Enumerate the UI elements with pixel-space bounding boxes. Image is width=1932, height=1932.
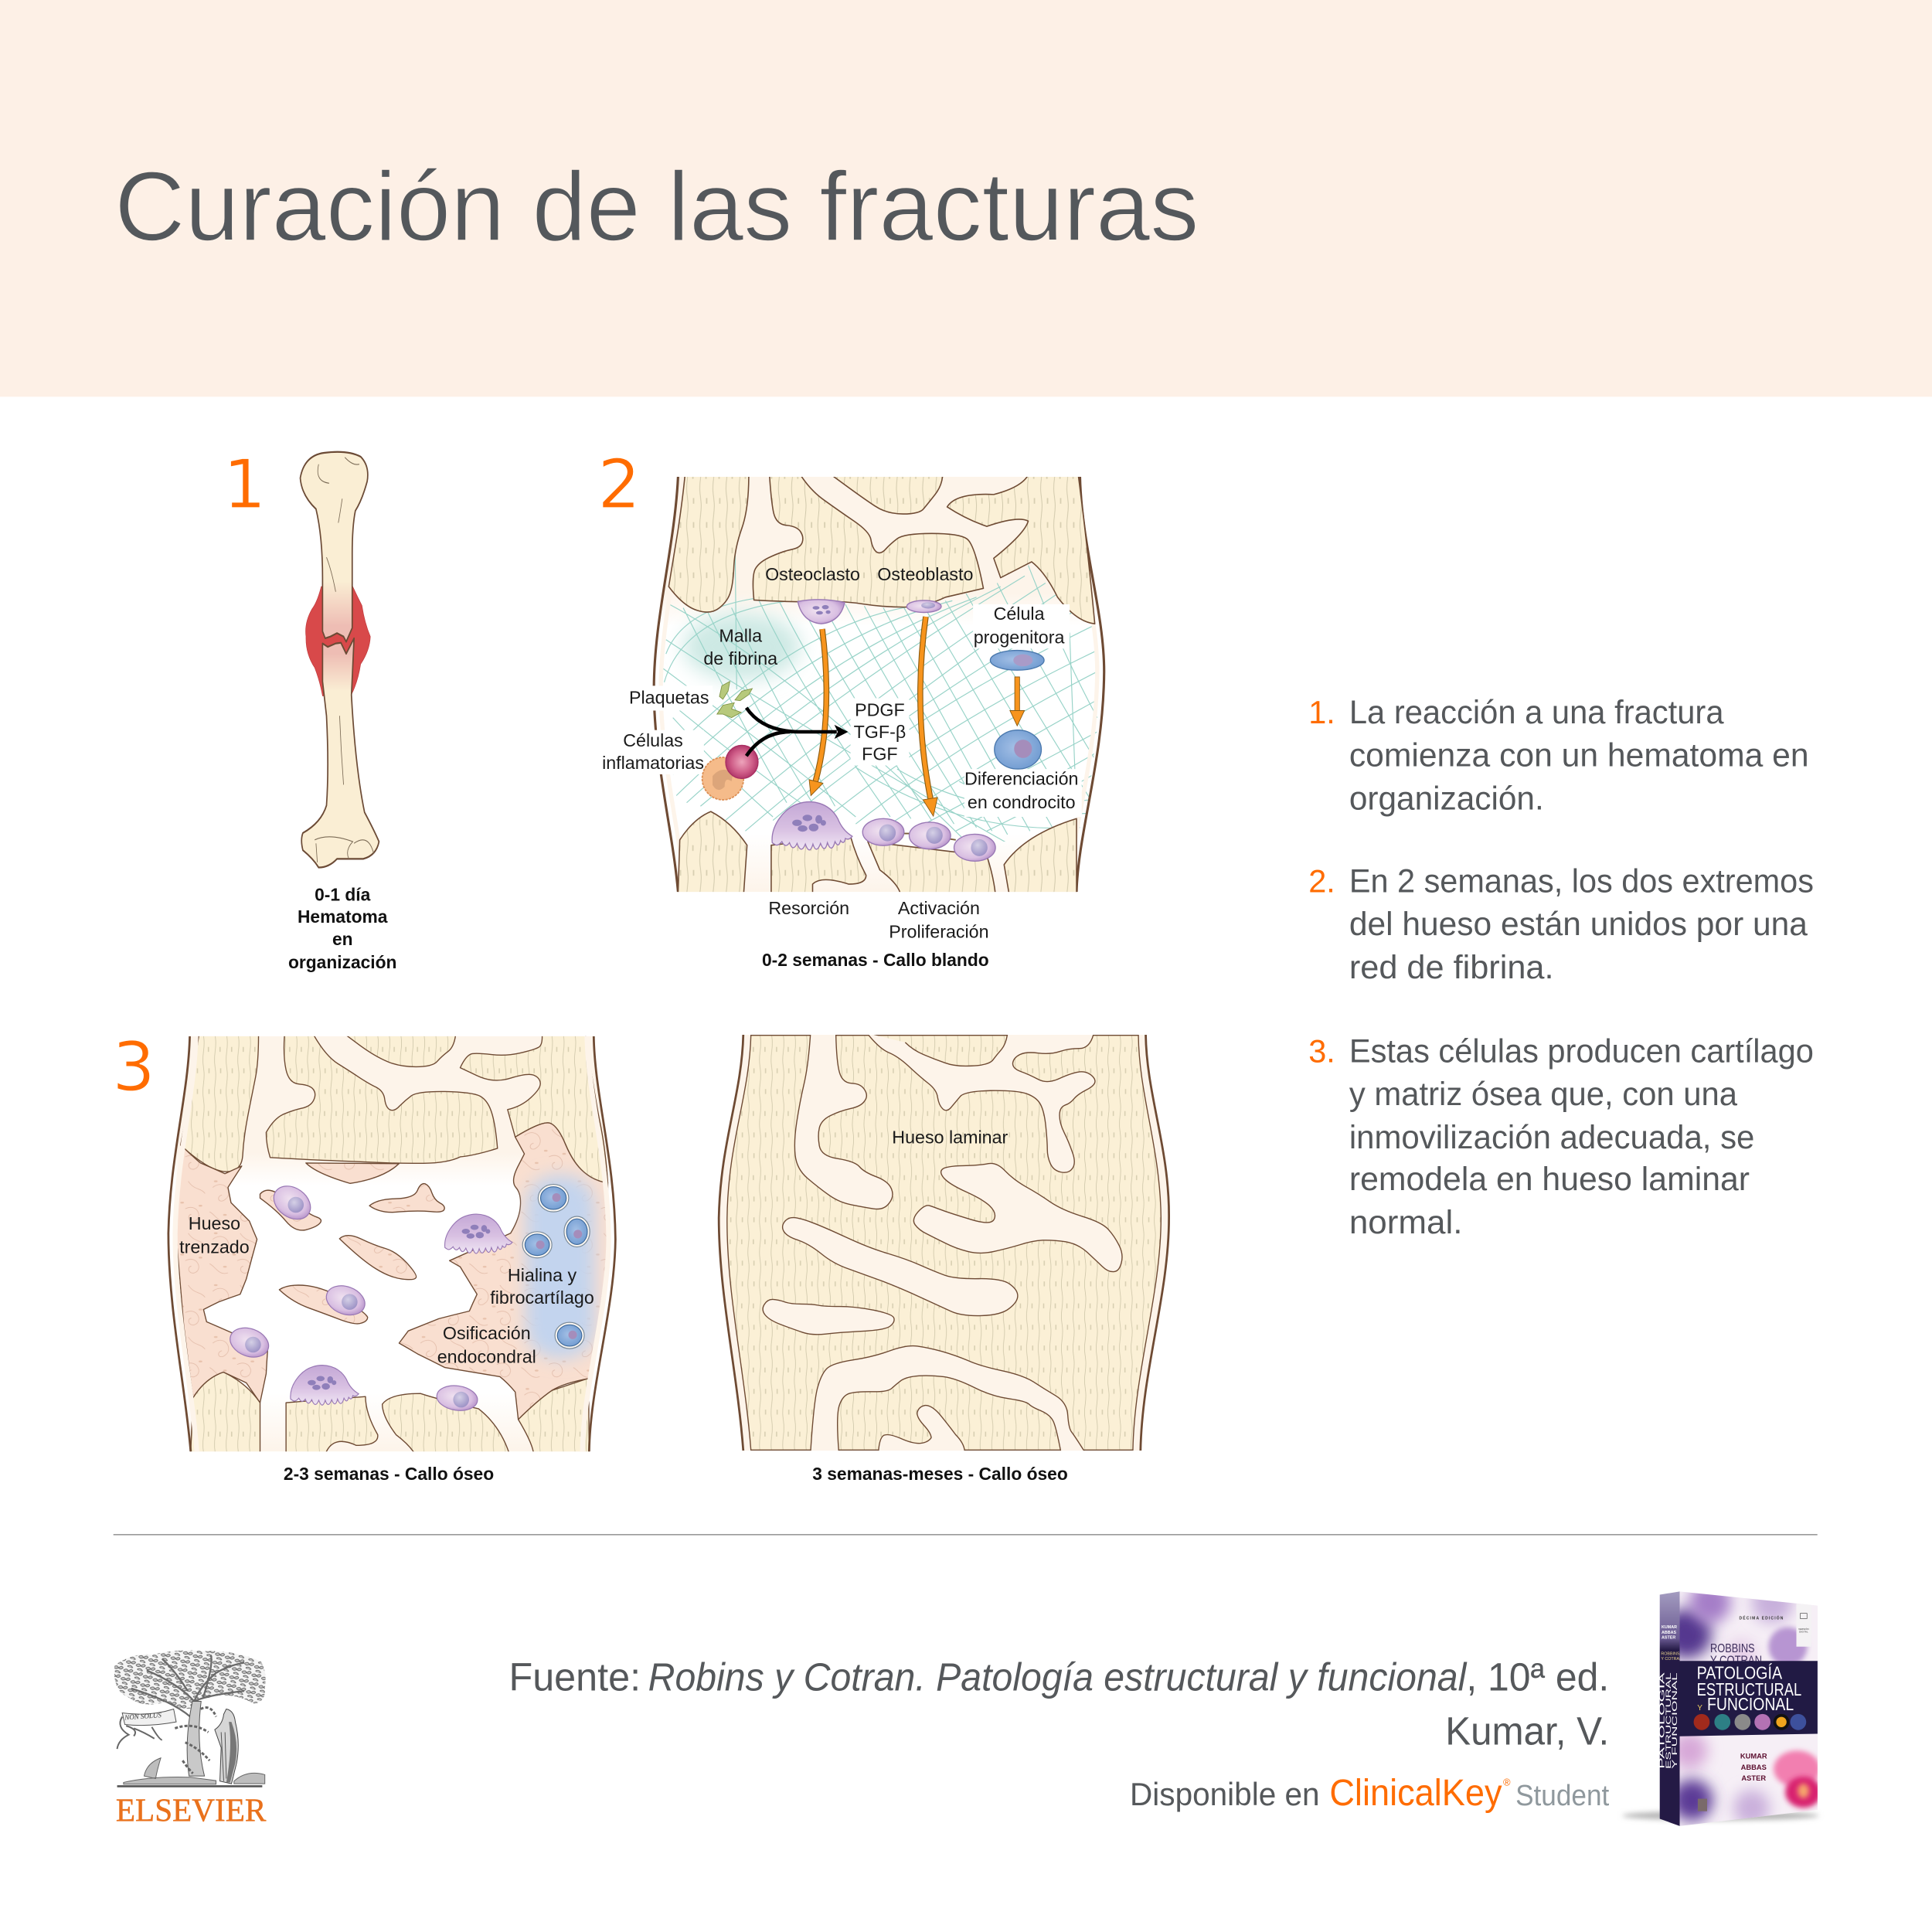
step 3: 3.: [1308, 1032, 1335, 1069]
woven bone: [176, 1123, 607, 1420]
cortical outlines: [719, 1035, 1169, 1451]
labels panel 3: Hialina y: [508, 1265, 577, 1285]
labels panel 3: trenzado: [179, 1236, 250, 1257]
caption panel 2: 0-2 semanas - Callo blando: [762, 950, 989, 970]
step 1: [1308, 694, 1809, 818]
orange arrow: activation: [920, 617, 937, 816]
lamellar bone body: [727, 1036, 1161, 1450]
caption panel 3: 2-3 semanas - Callo óseo: [284, 1464, 494, 1484]
labels panel 2: Resorción: [768, 898, 849, 918]
number 3: 3: [112, 1028, 155, 1107]
marrow cavities: [763, 1033, 1122, 1453]
front cover: [1662, 1582, 1821, 1828]
step 1: organización.: [1349, 781, 1544, 818]
source citation: [509, 1655, 1609, 1753]
step 3: normal.: [1349, 1204, 1463, 1241]
chondrocytes: [522, 1185, 590, 1349]
digital version badge: [1797, 1604, 1811, 1647]
labels panel 3: Hueso: [189, 1213, 240, 1233]
progenitor cell: [990, 651, 1044, 670]
caption panel 4: 3 semanas-meses - Callo óseo: [812, 1464, 1068, 1484]
number 1: 1: [223, 445, 266, 524]
panel 1: fractured bone: [288, 452, 396, 972]
source citation: Robins y Cotran. Patología estructural y funcional: [648, 1655, 1468, 1699]
source citation: Kumar, V.: [1445, 1709, 1609, 1753]
caption panel 1: Hematoma: [298, 906, 388, 927]
cortical band: [661, 477, 1097, 892]
title: Curación de las fracturas: [114, 152, 1199, 262]
inflammatory cell: orange: [702, 757, 743, 800]
orange arrow: differentiation: [1010, 677, 1025, 726]
front cover: ESTRUCTURAL: [1697, 1679, 1801, 1699]
authors: KUMAR: [1740, 1751, 1767, 1760]
header band: [0, 0, 1932, 396]
labels panel 2: progenitora: [974, 627, 1064, 647]
bone fragments: [181, 1035, 607, 1453]
labels panel 2: TGF-β: [854, 722, 906, 742]
osteoclast right: [445, 1214, 512, 1253]
orange arrow: resorption: [809, 629, 826, 795]
labels panel 3: fibrocartílago: [490, 1287, 594, 1308]
labels panel 2: Célula: [994, 604, 1045, 624]
source citation: , 10ª ed.: [1466, 1655, 1609, 1699]
ground shrubs: [124, 1758, 265, 1784]
tree branches: [131, 1655, 244, 1716]
osteoclast bottom: [291, 1366, 359, 1405]
step 1: La reacción a una fractura: [1349, 694, 1724, 731]
spine: Y FUNCIONAL: [1671, 1672, 1679, 1769]
step 2: [1308, 862, 1814, 986]
labels panel 2: Plaquetas: [629, 687, 709, 707]
step 3: Estas células producen cartílago: [1349, 1032, 1814, 1070]
chain of osteoblasts: [862, 818, 995, 861]
top small osteoclast: [798, 600, 845, 624]
tree canopy: [111, 1647, 270, 1714]
labels panel 2: inflamatorias: [602, 753, 704, 773]
series title: ROBBINS: [1710, 1642, 1755, 1655]
panel 2: soft callus: [600, 475, 1104, 970]
step 2: red de fibrina.: [1349, 949, 1554, 986]
edition: DÉCIMA EDICIÓN: [1740, 1614, 1784, 1621]
availability line: Student: [1515, 1779, 1610, 1812]
front cover: Y COTRAN: [1710, 1655, 1762, 1668]
labels panel 2: Osteoblasto: [877, 564, 973, 584]
title band: [1680, 1661, 1818, 1736]
chondrocyte: [995, 730, 1041, 769]
banner: NON SOLUS: [124, 1711, 162, 1722]
label panel 4: Hueso laminar: [892, 1128, 1009, 1148]
spine: ASTER: [1662, 1636, 1675, 1641]
trunk: [187, 1701, 205, 1776]
Elsevier logo: [111, 1647, 270, 1828]
spine: Y COTRAN: [1661, 1657, 1682, 1662]
book shadow: [1622, 1811, 1819, 1820]
panel 3: bony callus: [168, 1035, 615, 1484]
authors: [1740, 1751, 1767, 1782]
caption panel 1: en: [332, 929, 353, 949]
micrograph circles: [1694, 1714, 1806, 1730]
vine leaves: [175, 1708, 216, 1774]
illustration: soft callus tissue: [652, 477, 1105, 892]
spine: [1658, 1591, 1682, 1826]
labels panel 2: de fibrina: [703, 648, 777, 668]
panel 4: lamellar bone: [719, 1033, 1169, 1484]
step 2: del hueso están unidos por una: [1349, 906, 1808, 943]
bone fragments: [668, 475, 1095, 895]
scholar figure: [215, 1709, 238, 1784]
inflammatory cell: pink: [726, 745, 758, 778]
book cover: [1622, 1582, 1821, 1828]
caption panel 1: [288, 884, 396, 972]
labels panel 2: Células: [623, 730, 683, 750]
illustration: bony callus: [168, 1035, 615, 1453]
illustration: remodelled lamellar bone: [719, 1033, 1169, 1453]
bone surface details: [315, 457, 374, 862]
step 2: 2.: [1308, 862, 1335, 899]
labels panel 3: [179, 1213, 594, 1366]
digital version badge: VERSIÓN: [1798, 1627, 1809, 1631]
spine: ABBAS: [1662, 1631, 1676, 1635]
explanatory list: [1308, 694, 1814, 1241]
upper bone fragment: [301, 452, 368, 641]
labels panel 3: endocondral: [437, 1346, 536, 1366]
spine: ROBBINS: [1661, 1651, 1680, 1657]
banner: [117, 1709, 176, 1749]
labels panel 2: Proliferación: [889, 921, 989, 941]
caption panel 1: 0-1 día: [315, 884, 371, 904]
spine: ESTRUCTURAL: [1665, 1672, 1672, 1769]
availability line: ClinicalKey: [1329, 1773, 1502, 1814]
hematoma: [306, 587, 370, 696]
caption panel 1: organización: [288, 952, 396, 972]
labels panel 3: Osificación: [443, 1323, 531, 1343]
labels panel 2: Activación: [898, 898, 980, 918]
availability line: [1130, 1773, 1610, 1814]
hyaline cartilage glow: [526, 1175, 594, 1359]
front cover: Y: [1697, 1704, 1702, 1713]
availability line: ®: [1503, 1776, 1511, 1787]
mini publisher mark: [1698, 1799, 1707, 1811]
resorbing osteoclast: [772, 802, 852, 850]
number 2: 2: [597, 445, 641, 524]
labels panel 2: Diferenciación: [964, 769, 1078, 789]
step 3: inmovilización adecuada, se: [1349, 1119, 1754, 1156]
labels panel 2: [602, 564, 1078, 941]
wordmark: ELSEVIER: [116, 1792, 267, 1828]
cortical outlines: [168, 1036, 615, 1451]
fibrin glow: [683, 613, 801, 681]
marrow background: [654, 477, 1104, 892]
platelets: [717, 682, 752, 718]
labels panel 2: FGF: [862, 744, 898, 764]
step 2: En 2 semanas, los dos extremos: [1349, 862, 1814, 900]
label backgrounds: [600, 604, 1082, 817]
authors: ASTER: [1741, 1774, 1766, 1782]
labels panel 2: en condrocito: [968, 792, 1076, 812]
cortical outline left: [654, 477, 678, 892]
osteoblasts: [226, 1179, 479, 1413]
bone base: [719, 1035, 1169, 1451]
digital version badge: DIGITAL: [1799, 1631, 1808, 1634]
top small osteoblast: [906, 600, 941, 613]
step 1: comienza con un hematoma en: [1349, 737, 1809, 774]
source citation: Fuente:: [509, 1655, 641, 1699]
black signal arrows: [747, 708, 848, 756]
step 3: remodela en hueso laminar: [1349, 1161, 1750, 1198]
cortical outline right: [1077, 477, 1104, 892]
ground line: [117, 1785, 262, 1787]
step 1: 1.: [1308, 694, 1335, 730]
availability line: Disponible en: [1130, 1776, 1320, 1812]
labels panel 2: PDGF: [855, 699, 905, 719]
labels panel 2: Osteoclasto: [765, 564, 860, 584]
labels panel 2: Malla: [719, 626, 762, 646]
spine: KUMAR: [1662, 1625, 1677, 1630]
step 3: y matriz ósea que, con una: [1349, 1076, 1737, 1113]
step 3: [1308, 1032, 1814, 1241]
marrow background: [168, 1036, 615, 1451]
front cover: FUNCIONAL: [1707, 1694, 1794, 1714]
fibrin mesh: [662, 537, 1097, 845]
lower bone fragment: [301, 638, 379, 867]
illustration: bone with hematoma: [301, 452, 379, 867]
front cover: PATOLOGÍA: [1697, 1662, 1783, 1682]
spine: PATOLOGÍA: [1658, 1671, 1666, 1769]
authors: ABBAS: [1741, 1763, 1767, 1771]
